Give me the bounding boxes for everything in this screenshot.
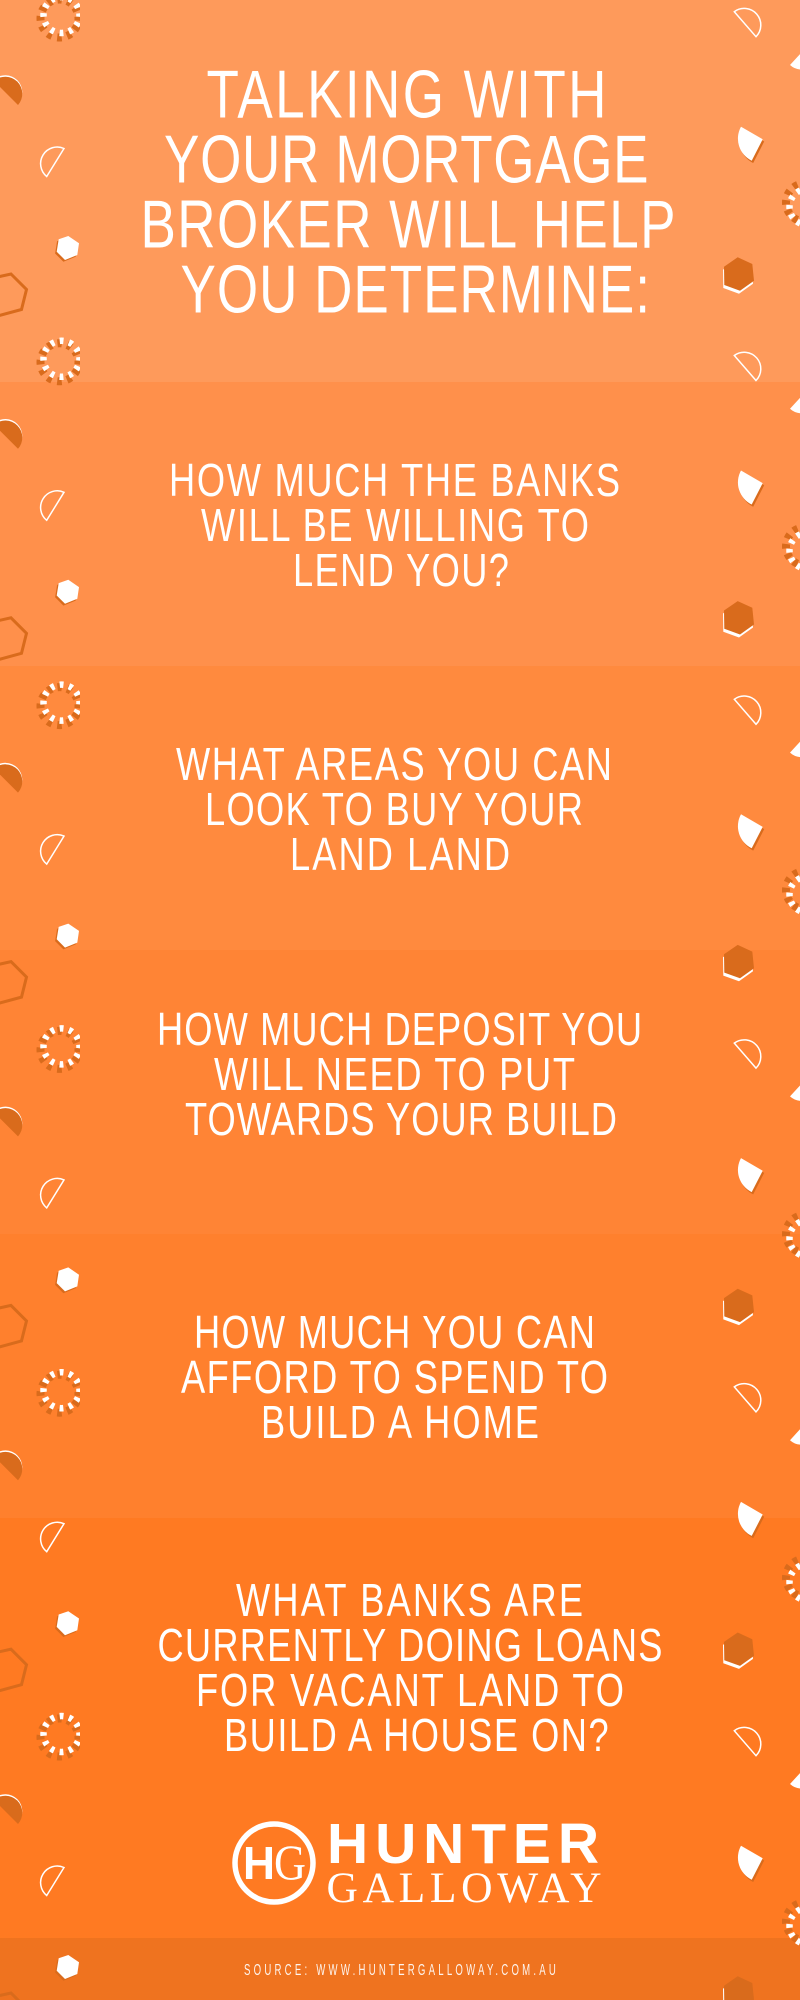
title: TALKING WITH (206, 56, 606, 132)
heading: vacant land loans: WHAT BANKS ARE (236, 1574, 583, 1626)
icon: HG roundel: H (243, 1837, 275, 1889)
title: YOU DETERMINE: (180, 251, 650, 327)
panel: affordable build spend (0, 1234, 800, 1518)
icon: HG roundel (235, 1824, 313, 1902)
source line: SOURCE: WWW.HUNTERGALLOWAY.COM.AU (244, 1961, 556, 1979)
heading: deposit: TOWARDS YOUR BUILD (185, 1093, 617, 1145)
heading: spend: AFFORD TO SPEND TO (181, 1351, 608, 1403)
decorative shapes: row 1 (0, 0, 800, 316)
wordmark: Galloway: GALLOWAY (326, 1864, 602, 1912)
heading: spend: BUILD A HOME (261, 1396, 539, 1448)
wordmark: Hunter: HUNTER (327, 1812, 599, 1876)
title: BROKER WILL HELP (140, 186, 675, 262)
decorative shapes: row 5 (0, 1372, 800, 1691)
heading: vacant land loans: BUILD A HOUSE ON? (224, 1709, 609, 1761)
heading: vacant land loans (157, 1574, 662, 1761)
heading: lending amount: LEND YOU? (293, 544, 509, 596)
decorative shapes: row 2 (0, 341, 800, 659)
logo: Hunter Galloway (235, 1812, 602, 1912)
heading: spend: HOW MUCH YOU CAN (194, 1306, 595, 1358)
panel: banks and logo (0, 1518, 800, 1938)
panel: how much the banks will lend (0, 382, 800, 666)
heading: deposit: WILL NEED TO PUT (214, 1048, 575, 1100)
heading: areas: LAND LAND (290, 828, 510, 880)
decorative shapes: row 6 (0, 1716, 800, 2000)
heading: lending amount: HOW MUCH THE BANKS (169, 454, 620, 506)
heading: vacant land loans: CURRENTLY DOING LOANS (157, 1619, 662, 1671)
title (140, 56, 675, 327)
heading: lending amount: WILL BE WILLING TO (201, 499, 589, 551)
heading: lending amount (169, 454, 620, 596)
heading: areas (176, 738, 612, 880)
heading: vacant land loans: FOR VACANT LAND TO (196, 1664, 624, 1716)
panel: deposit needed (0, 950, 800, 1234)
panel: footer (0, 1938, 800, 2000)
heading: deposit (157, 1003, 642, 1145)
heading: spend (181, 1306, 608, 1448)
heading: areas: WHAT AREAS YOU CAN (176, 738, 612, 790)
decorative shapes: row 3 (0, 685, 800, 1003)
decorative shapes: row 4 (0, 1028, 800, 1347)
panel: areas to buy land (0, 666, 800, 950)
panel: title (0, 0, 800, 382)
heading: areas: LOOK TO BUY YOUR (205, 783, 583, 835)
icon: HG roundel: G (274, 1834, 306, 1890)
title: YOUR MORTGAGE (164, 121, 649, 197)
heading: deposit: HOW MUCH DEPOSIT YOU (157, 1003, 642, 1055)
